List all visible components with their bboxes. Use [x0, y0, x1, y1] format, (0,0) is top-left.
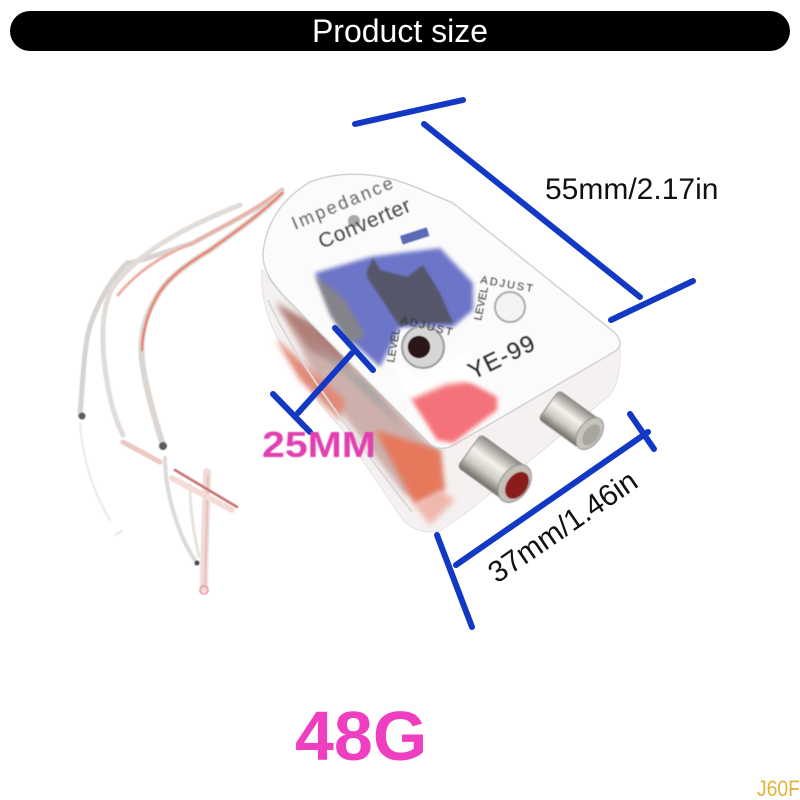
- device top face: ADJUST: [479, 274, 534, 295]
- dimension: width 37mm: 37mm/1.46in: [482, 464, 644, 590]
- rca jack: left: [457, 434, 538, 509]
- device top face: [263, 173, 620, 448]
- dimension: height 25mm: [262, 328, 376, 465]
- level adjust hole 2: [495, 292, 525, 322]
- label: level adjust: LEVEL: [385, 328, 403, 364]
- header bar: [10, 11, 790, 51]
- heading: product size: Product size: [312, 13, 488, 49]
- dimension: height 25mm: 25MM: [262, 424, 376, 465]
- label: ic: [400, 227, 429, 245]
- label: converter: Converter: [315, 194, 414, 254]
- dimension: length 55mm: [355, 100, 718, 320]
- device top face: ADJUST: [399, 314, 454, 339]
- device lower body: [262, 270, 620, 532]
- device top face: LEVEL: [472, 286, 491, 322]
- level adjust hole: [402, 326, 444, 368]
- screw dot: [348, 215, 360, 227]
- wires: [78, 190, 282, 594]
- weight label: 48G: [295, 697, 427, 775]
- label: impedance: Impedance: [289, 173, 396, 234]
- label: model number: YE-99: [464, 330, 539, 385]
- dimension: width 37mm: [437, 414, 654, 627]
- device: impedance converter: [262, 173, 620, 532]
- dimension: length 55mm: 55mm/2.17in: [545, 173, 718, 206]
- rca jack: right: [539, 390, 609, 455]
